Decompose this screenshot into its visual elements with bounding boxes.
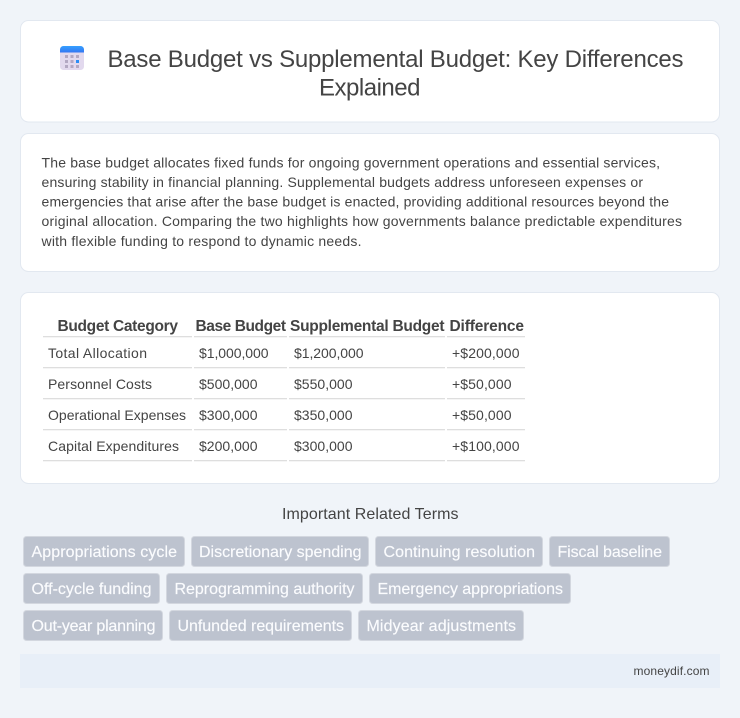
text block: summary paragraph: The base budget allocates fixed funds for ongoing government operations and essential services, <box>42 154 660 170</box>
tag: discretionary spending <box>192 536 368 566</box>
row: operational expenses: +$50,000 <box>452 407 512 423</box>
row: personnel costs: +$50,000 <box>452 376 512 392</box>
row: personnel costs <box>48 376 512 392</box>
row: operational expenses <box>48 407 512 423</box>
text block: summary paragraph: original allocation. Comparing the two highlights how governments balance predictable expenditures <box>42 213 682 229</box>
row: capital expenditures: $200,000 <box>199 438 258 454</box>
table header: Base Budget <box>196 318 286 335</box>
tag: off-cycle funding: Off-cycle funding <box>32 581 152 598</box>
tag: appropriations cycle: Appropriations cycle <box>32 544 177 561</box>
table header: Difference <box>450 318 524 335</box>
title: Explained <box>319 75 420 102</box>
tag: midyear adjustments: Midyear adjustments <box>366 618 516 635</box>
row: capital expenditures: Capital Expenditures <box>48 438 179 454</box>
row: personnel costs: $550,000 <box>294 376 353 392</box>
row: total allocation: $1,200,000 <box>294 345 364 361</box>
title <box>108 46 684 102</box>
panel: title card <box>20 20 720 122</box>
text block: summary paragraph <box>40 154 682 249</box>
tag: emergency appropriations <box>370 574 570 604</box>
tag: continuing resolution: Continuing resolution <box>384 544 535 561</box>
title: Base Budget vs Supplemental Budget: Key Differences <box>108 46 684 73</box>
panel: intro text <box>20 134 720 272</box>
row: capital expenditures: +$100,000 <box>452 438 520 454</box>
panel: comparison table <box>20 292 720 484</box>
row: operational expenses: $350,000 <box>294 407 353 423</box>
tag: emergency appropriations: Emergency appropriations <box>378 581 563 598</box>
row: operational expenses: Operational Expenses <box>48 407 186 423</box>
tag: appropriations cycle <box>24 536 184 566</box>
row: total allocation: $1,000,000 <box>199 345 269 361</box>
row: capital expenditures: $300,000 <box>294 438 353 454</box>
row: capital expenditures <box>48 438 520 454</box>
table header <box>58 318 524 335</box>
tag: reprogramming authority: Reprogramming authority <box>174 581 354 598</box>
row: operational expenses: $300,000 <box>199 407 258 423</box>
tag: fiscal baseline: Fiscal baseline <box>558 544 662 561</box>
text block: summary paragraph: with flexible funding to respond to dynamic needs. <box>40 233 362 249</box>
tag: discretionary spending: Discretionary spending <box>199 544 362 561</box>
tag: midyear adjustments <box>358 610 524 640</box>
tag: reprogramming authority <box>166 574 362 604</box>
tag: out-year planning <box>24 610 162 640</box>
row: total allocation <box>48 345 520 361</box>
tag: unfunded requirements <box>170 610 352 640</box>
table header: Budget Category <box>58 318 178 335</box>
text block: summary paragraph: ensuring stability in financial planning. Supplemental budgets address unforeseen expenses or <box>42 174 643 190</box>
row: total allocation: +$200,000 <box>452 345 520 361</box>
tag group: related terms <box>24 536 670 640</box>
row: total allocation: Total Allocation <box>48 345 147 361</box>
text block: summary paragraph: emergencies that arise after the base budget is enacted, providing additional resources beyond the <box>42 194 669 210</box>
tag: off-cycle funding <box>24 574 160 604</box>
heading: important related terms: Important Related Terms <box>282 506 458 523</box>
table grid lines <box>43 336 525 461</box>
row: personnel costs: $500,000 <box>199 376 258 392</box>
footer bar <box>20 654 720 688</box>
footer: source: moneydif.com <box>634 664 710 678</box>
row: personnel costs: Personnel Costs <box>48 376 152 392</box>
table header: Supplemental Budget <box>290 318 444 335</box>
tag: out-year planning: Out-year planning <box>32 618 156 635</box>
icon: calendar <box>60 46 84 70</box>
tag: unfunded requirements: Unfunded requirements <box>178 618 344 635</box>
tag: continuing resolution <box>376 536 542 566</box>
tag: fiscal baseline <box>550 536 670 566</box>
